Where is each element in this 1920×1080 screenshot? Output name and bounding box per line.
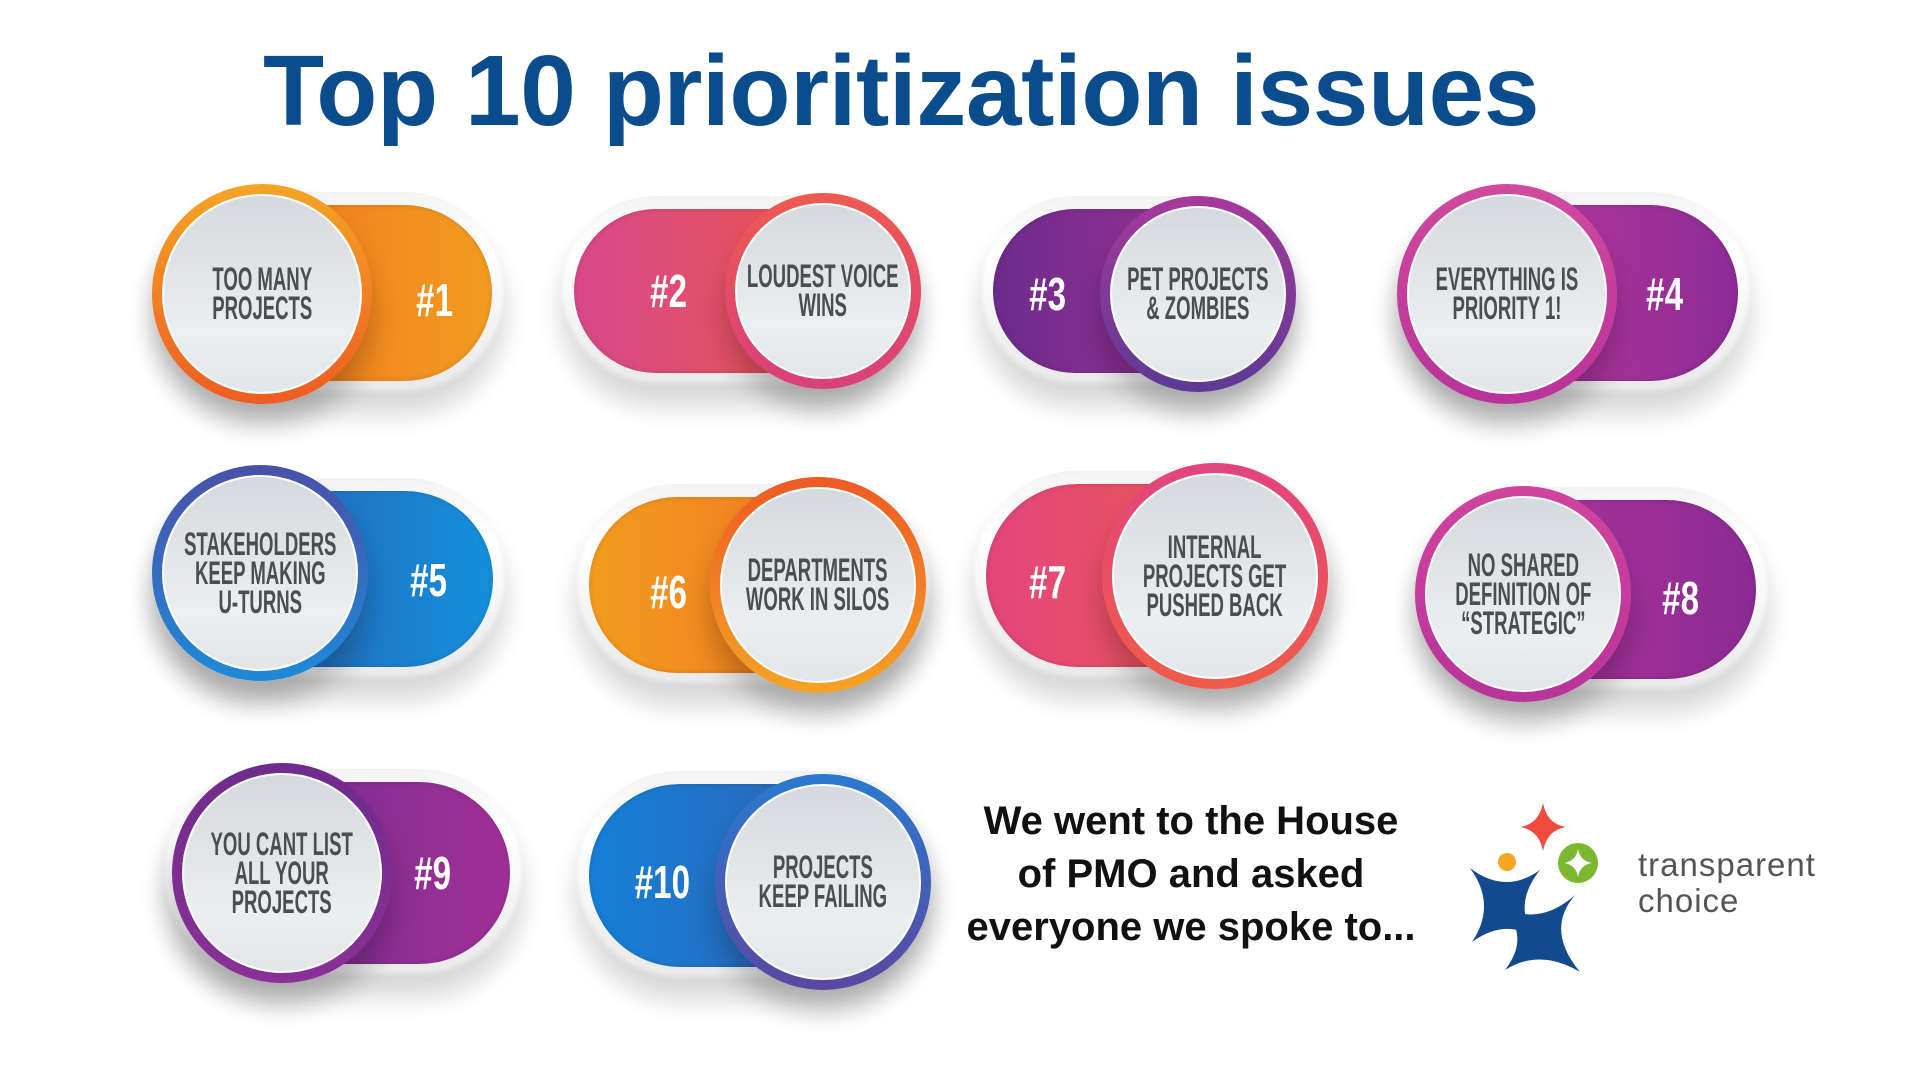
toggle #10 <box>567 771 947 1024</box>
toggle #4: EVERYTHING IS <box>1436 261 1578 297</box>
toggle #1 <box>138 184 514 438</box>
toggle #8: “STRATEGIC” <box>1461 604 1585 640</box>
toggle #10: PROJECTS <box>773 849 873 885</box>
icon: logo stars <box>1470 803 1598 972</box>
toggle #2 <box>552 193 934 425</box>
toggle #6 <box>567 477 944 728</box>
logo text: choice <box>1638 882 1739 919</box>
toggle #5: U-TURNS <box>218 584 302 620</box>
toggle #1: PROJECTS <box>212 290 312 326</box>
toggle #1: TOO MANY <box>212 261 312 297</box>
toggle #3: #3 <box>1030 268 1066 320</box>
toggle #8: NO SHARED <box>1467 546 1579 582</box>
toggle #9: YOU CANT LIST <box>211 826 353 862</box>
toggle #2: LOUDEST VOICE <box>747 258 899 294</box>
toggle #4: #4 <box>1647 268 1683 320</box>
toggle #6: DEPARTMENTS <box>748 552 888 588</box>
toggle #5 <box>137 465 515 718</box>
logo text <box>1638 846 1816 919</box>
caption text <box>966 799 1416 949</box>
toggle #9: #9 <box>415 847 451 899</box>
toggle #10: KEEP FAILING <box>759 878 887 914</box>
toggle #2: WINS <box>799 287 847 323</box>
toggle #3 <box>971 196 1310 427</box>
caption text: of PMO and asked <box>1018 852 1364 896</box>
toggle #8: DEFINITION OF <box>1455 576 1591 612</box>
toggle #4: PRIORITY 1! <box>1453 290 1561 326</box>
toggle #8: #8 <box>1663 572 1699 624</box>
toggle #7: PUSHED BACK <box>1147 586 1283 622</box>
toggle #3: PET PROJECTS <box>1127 261 1269 297</box>
toggle #1: #1 <box>417 274 453 326</box>
caption text: everyone we spoke to... <box>966 905 1416 949</box>
toggle #7: INTERNAL <box>1168 528 1262 564</box>
toggle #5: KEEP MAKING <box>195 554 325 590</box>
toggle #3: & ZOMBIES <box>1146 290 1250 326</box>
toggle #7: #7 <box>1030 556 1066 608</box>
toggle #6: #6 <box>651 566 687 618</box>
toggle #9: ALL YOUR <box>235 854 329 890</box>
toggle #10: #10 <box>634 856 690 908</box>
toggle #5: #5 <box>411 554 447 606</box>
logo: transparent choice <box>1470 803 1816 972</box>
logo text: transparent <box>1638 846 1816 883</box>
caption text: We went to the House <box>984 799 1398 843</box>
toggle #9 <box>152 763 532 1018</box>
toggle #6: WORK IN SILOS <box>746 581 890 617</box>
toggle #7: PROJECTS GET <box>1143 558 1287 594</box>
toggle #5: STAKEHOLDERS <box>184 526 336 562</box>
toggle #7 <box>964 463 1345 724</box>
toggle #2: #2 <box>651 265 687 317</box>
title: Top 10 prioritization issues <box>263 35 1539 147</box>
toggle #8 <box>1400 486 1778 736</box>
toggle #9: PROJECTS <box>232 884 332 920</box>
toggle #4 <box>1382 184 1760 438</box>
